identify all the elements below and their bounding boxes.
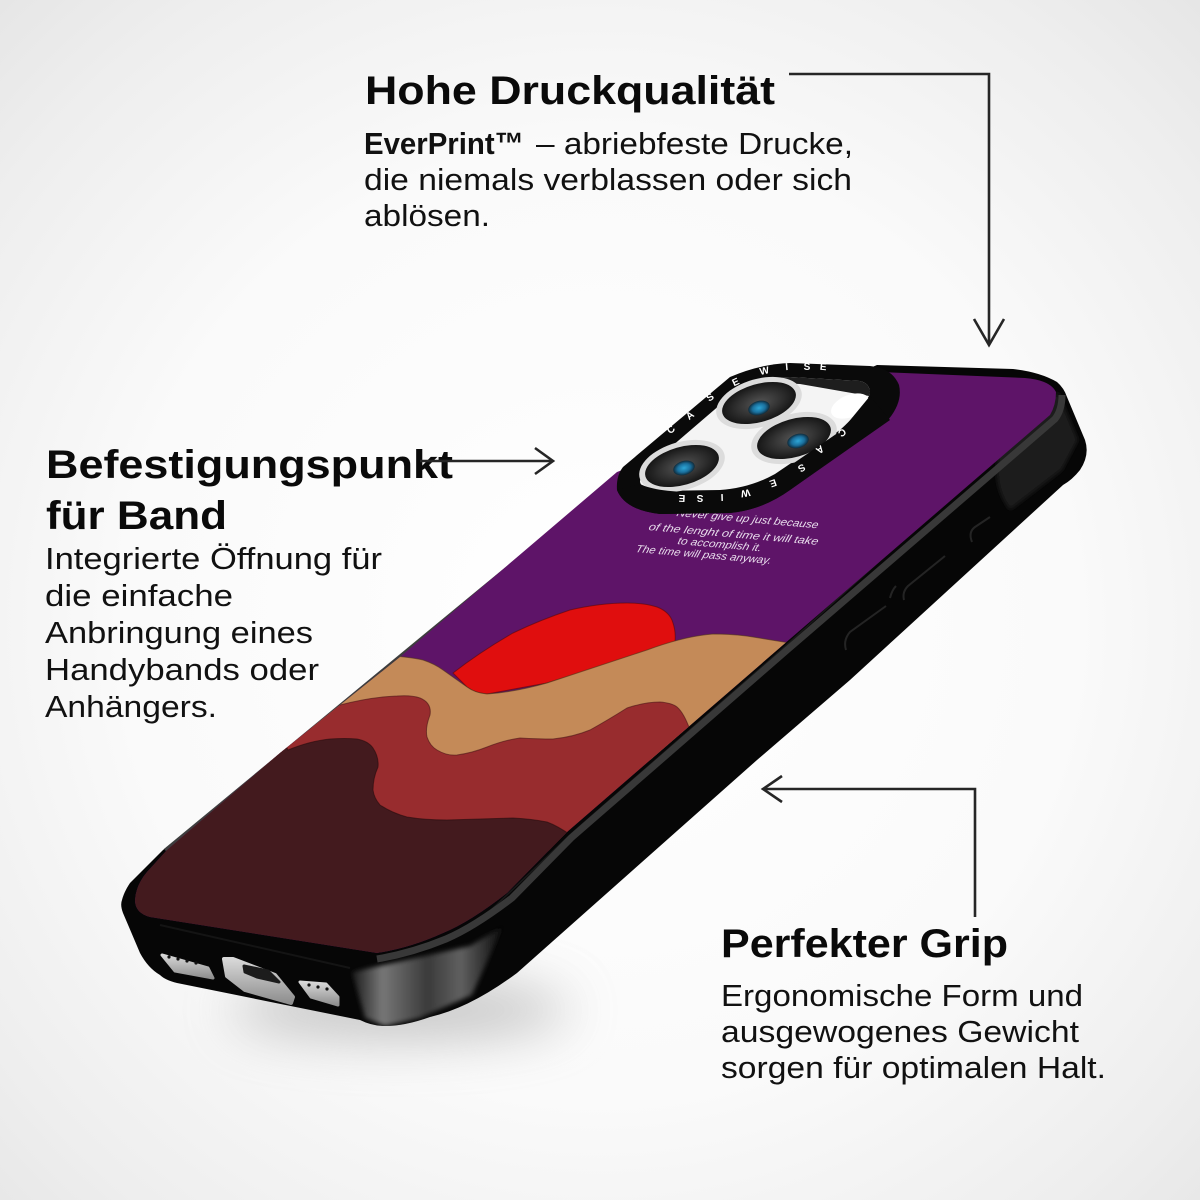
CASEWISE ring lettering: A: [813, 442, 826, 456]
dark maroon dune: [135, 738, 567, 953]
heading: für Band: [46, 494, 227, 538]
heading: Hohe Druckqualität: [365, 69, 775, 113]
lenses: [633, 368, 843, 501]
purple field: [120, 360, 1080, 960]
heading: Befestigungspunkt: [46, 443, 453, 487]
body text: – abriebfeste Drucke,: [536, 126, 853, 161]
quote: to accomplish it.: [676, 535, 763, 554]
CASEWISE ring lettering: C: [835, 425, 848, 439]
body text: Anbringung eines: [45, 615, 313, 650]
callout: print quality: [364, 69, 853, 233]
camera island: [617, 362, 900, 514]
rim: [377, 395, 1062, 959]
callout: strap point: [45, 443, 453, 724]
CASEWISE ring lettering: C: [665, 424, 678, 437]
body text: die einfache: [45, 578, 233, 613]
body text: sorgen für optimalen Halt.: [721, 1050, 1106, 1085]
quote: The time will pass anyway.: [634, 543, 773, 567]
body text: die niemals verblassen oder sich: [364, 162, 852, 197]
bottom ports: [162, 955, 338, 1005]
left speaker: [162, 955, 213, 978]
phone case: [100, 360, 1087, 1026]
arrow: strap point: [420, 448, 553, 474]
body text: Integrierte Öffnung für: [45, 541, 382, 576]
CASEWISE ring lettering: E: [768, 476, 778, 489]
CASEWISE ring lettering: S: [804, 362, 811, 373]
CASEWISE ring lettering: E: [678, 492, 685, 503]
callout: grip: [721, 922, 1106, 1085]
side buttons: [845, 517, 990, 650]
arrow: grip: [763, 776, 975, 917]
body text: Ergonomische Form und: [721, 978, 1083, 1013]
crimson dune: [250, 695, 690, 860]
heading: Perfekter Grip: [721, 922, 1008, 966]
case body: [121, 365, 1087, 1026]
body text: Anhängers.: [45, 689, 217, 724]
island inner: [640, 377, 870, 491]
quote: Never give up just because: [675, 507, 820, 531]
quote: of the lenght of time it will take: [647, 521, 820, 548]
CASEWISE ring lettering: W: [759, 365, 771, 378]
CASEWISE ring lettering: W: [739, 486, 751, 499]
side groove: [492, 564, 876, 908]
CASEWISE ring lettering: [665, 362, 848, 503]
bumper patch: [997, 392, 1078, 510]
CASEWISE ring lettering: A: [684, 409, 697, 423]
heading: [46, 443, 453, 538]
case side details: [160, 392, 1078, 1026]
lower ring band: [617, 396, 890, 514]
corner sheen: [352, 926, 503, 1026]
quote: [634, 507, 820, 567]
body text: [364, 126, 853, 233]
body text: ausgewogenes Gewicht: [721, 1014, 1079, 1049]
CASEWISE ring lettering: S: [795, 461, 807, 474]
island ring: [617, 363, 900, 514]
red sun: [453, 603, 675, 694]
phone shadow: [230, 980, 570, 1040]
CASEWISE ring lettering: I: [720, 491, 724, 502]
body text: EverPrint™: [364, 126, 524, 161]
CASEWISE ring lettering: I: [785, 362, 789, 373]
back panel artwork: [100, 360, 1080, 960]
right speaker: [300, 982, 338, 1005]
CASEWISE ring lettering: E: [731, 376, 742, 389]
charging port: [224, 959, 293, 1003]
flash: [827, 388, 873, 424]
body text: [45, 541, 382, 724]
tan dune: [300, 634, 790, 760]
body text: ablösen.: [364, 198, 490, 233]
body text: [721, 978, 1106, 1085]
CASEWISE ring lettering: S: [705, 391, 717, 404]
arrow: print quality: [789, 74, 1004, 345]
rim edge line: [165, 475, 620, 850]
CASEWISE ring lettering: S: [696, 492, 703, 503]
CASEWISE ring lettering: E: [819, 362, 827, 373]
body text: Handybands oder: [45, 652, 319, 687]
